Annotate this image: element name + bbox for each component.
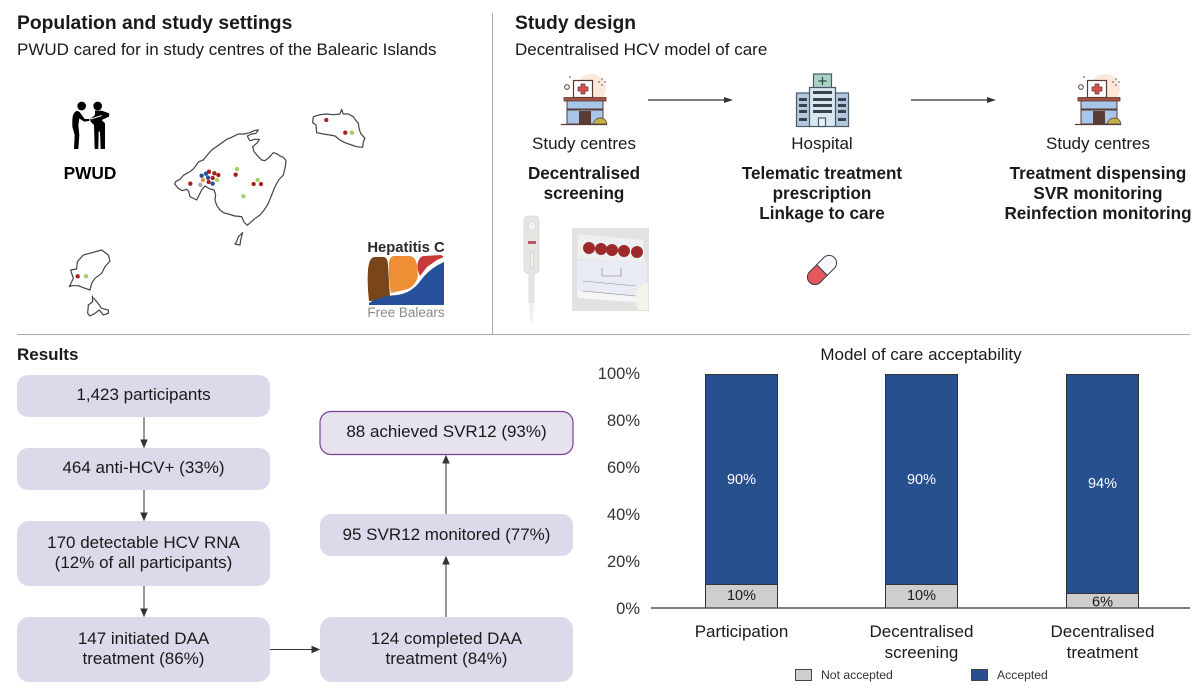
bar: decentralised treatment: 94% (1088, 476, 1117, 492)
arrow: completed to monitored (443, 557, 449, 617)
arrow: monitored to achieved (443, 456, 449, 514)
text: treatment dispensing and monitoring: Reinfection monitoring (1004, 204, 1192, 223)
map: Ibiza and Formentera with study centres (69, 250, 110, 316)
arrow: initiated to completed (270, 646, 319, 652)
image: dried blood spot card (572, 228, 649, 311)
arrow: anti-HCV to RNA (141, 490, 147, 520)
box: 124 completed DAA (320, 617, 573, 682)
label: PWUD: PWUD (64, 163, 116, 183)
y axis labels: 100% (598, 365, 640, 383)
box: 1,423 participants (17, 375, 270, 417)
text: telematic treatment (742, 164, 902, 223)
chart: model of care acceptability (598, 345, 1190, 682)
text: telematic treatment: Telematic treatment (742, 164, 902, 183)
box: 464 anti-HCV+ (17, 448, 270, 490)
box: 88 achieved SVR12 (320, 412, 573, 454)
bar: decentralised screening (886, 374, 958, 608)
subheading: population: PWUD cared for in study centres of the Balearic Islands (17, 40, 437, 59)
y axis labels: 60% (607, 459, 640, 477)
box: 170 detectable HCV RNA: 170 detectable HCV RNA (47, 533, 241, 552)
chart title: Model of care acceptability (820, 345, 1022, 364)
x axis labels: Decentralised (1051, 622, 1154, 641)
panel: results flow (17, 345, 573, 682)
legend (796, 668, 1048, 682)
logo: Hepatitis C Free Balears (367, 240, 445, 320)
y axis labels (598, 365, 640, 618)
x axis labels: treatment (1067, 643, 1139, 662)
box: 147 initiated DAA: 147 initiated DAA (78, 629, 210, 648)
heading: population: Population and study settings (17, 13, 292, 34)
heading: study design: Study design (515, 13, 636, 34)
x axis labels: screening (885, 643, 958, 662)
map: Menorca with study centres (313, 109, 365, 147)
y axis labels: 0% (616, 600, 640, 618)
map: Mallorca with study centres (175, 130, 286, 245)
bar: decentralised screening: 10% (907, 588, 936, 604)
x axis labels (695, 622, 1154, 662)
panel: population and study settings (17, 13, 445, 320)
text: decentralised screening: Decentralised (528, 164, 640, 183)
y axis labels: 20% (607, 553, 640, 571)
text: study centres left: Study centres (532, 134, 636, 153)
arrow: RNA to initiated (141, 586, 147, 616)
text: study centres right: Study centres (1046, 134, 1150, 153)
text: treatment dispensing and monitoring (1004, 164, 1192, 223)
x axis labels: Decentralised (870, 622, 973, 641)
logo: Hepatitis C Free Balears: Free Balears (367, 305, 445, 320)
bar: decentralised treatment (1066, 374, 1138, 610)
subheading: study design: Decentralised HCV model of care (515, 40, 767, 59)
bar: decentralised screening: 90% (907, 472, 936, 488)
box: 88 achieved SVR12: 88 achieved SVR12 (93%) (346, 422, 547, 441)
arrow: study centres to hospital (648, 97, 733, 103)
legend: Accepted (997, 668, 1048, 682)
box: 170 detectable HCV RNA (17, 521, 270, 586)
icon: pill (804, 252, 840, 288)
bar: participation: 10% (727, 588, 756, 604)
text: hospital: Hospital (791, 134, 853, 153)
box: 464 anti-HCV+: 464 anti-HCV+ (33%) (62, 458, 225, 477)
logo: Hepatitis C Free Balears: Hepatitis C (367, 240, 445, 256)
text: treatment dispensing and monitoring: Treatment dispensing (1010, 164, 1186, 183)
y axis labels: 40% (607, 506, 640, 524)
icon: study centre left (561, 74, 607, 124)
text: decentralised screening: screening (544, 184, 624, 203)
icon: two people (72, 102, 109, 149)
arrow: hospital to study centres (911, 97, 996, 103)
text: telematic treatment: prescription (773, 184, 871, 203)
legend: Not accepted (821, 668, 893, 682)
heading: results: Results (17, 345, 78, 364)
bar: participation (706, 374, 778, 608)
x axis labels: Participation (695, 622, 788, 641)
box: 1,423 participants: 1,423 participants (76, 385, 211, 404)
text: treatment dispensing and monitoring: SVR monitoring (1033, 184, 1163, 203)
text: telematic treatment: Linkage to care (759, 204, 885, 223)
icon: rapid test stick (524, 216, 539, 323)
bar: decentralised treatment: 6% (1092, 594, 1113, 610)
box: 124 completed DAA: treatment (84%) (386, 649, 507, 668)
icon: hospital (796, 74, 848, 126)
arrow: participants to anti-HCV (141, 417, 147, 447)
box: 95 SVR12 monitored (320, 514, 573, 556)
text: decentralised screening (528, 164, 640, 203)
y axis labels: 80% (607, 412, 640, 430)
box: 170 detectable HCV RNA: (12% of all participants) (55, 553, 232, 572)
panel: study design (515, 13, 1192, 323)
box: 147 initiated DAA (17, 617, 270, 682)
box: 95 SVR12 monitored: 95 SVR12 monitored (77%) (343, 525, 550, 544)
icon: study centre right (1075, 74, 1121, 124)
box: 147 initiated DAA: treatment (86%) (83, 649, 204, 668)
bar: participation: 90% (727, 472, 756, 488)
box: 124 completed DAA: 124 completed DAA (371, 629, 523, 648)
